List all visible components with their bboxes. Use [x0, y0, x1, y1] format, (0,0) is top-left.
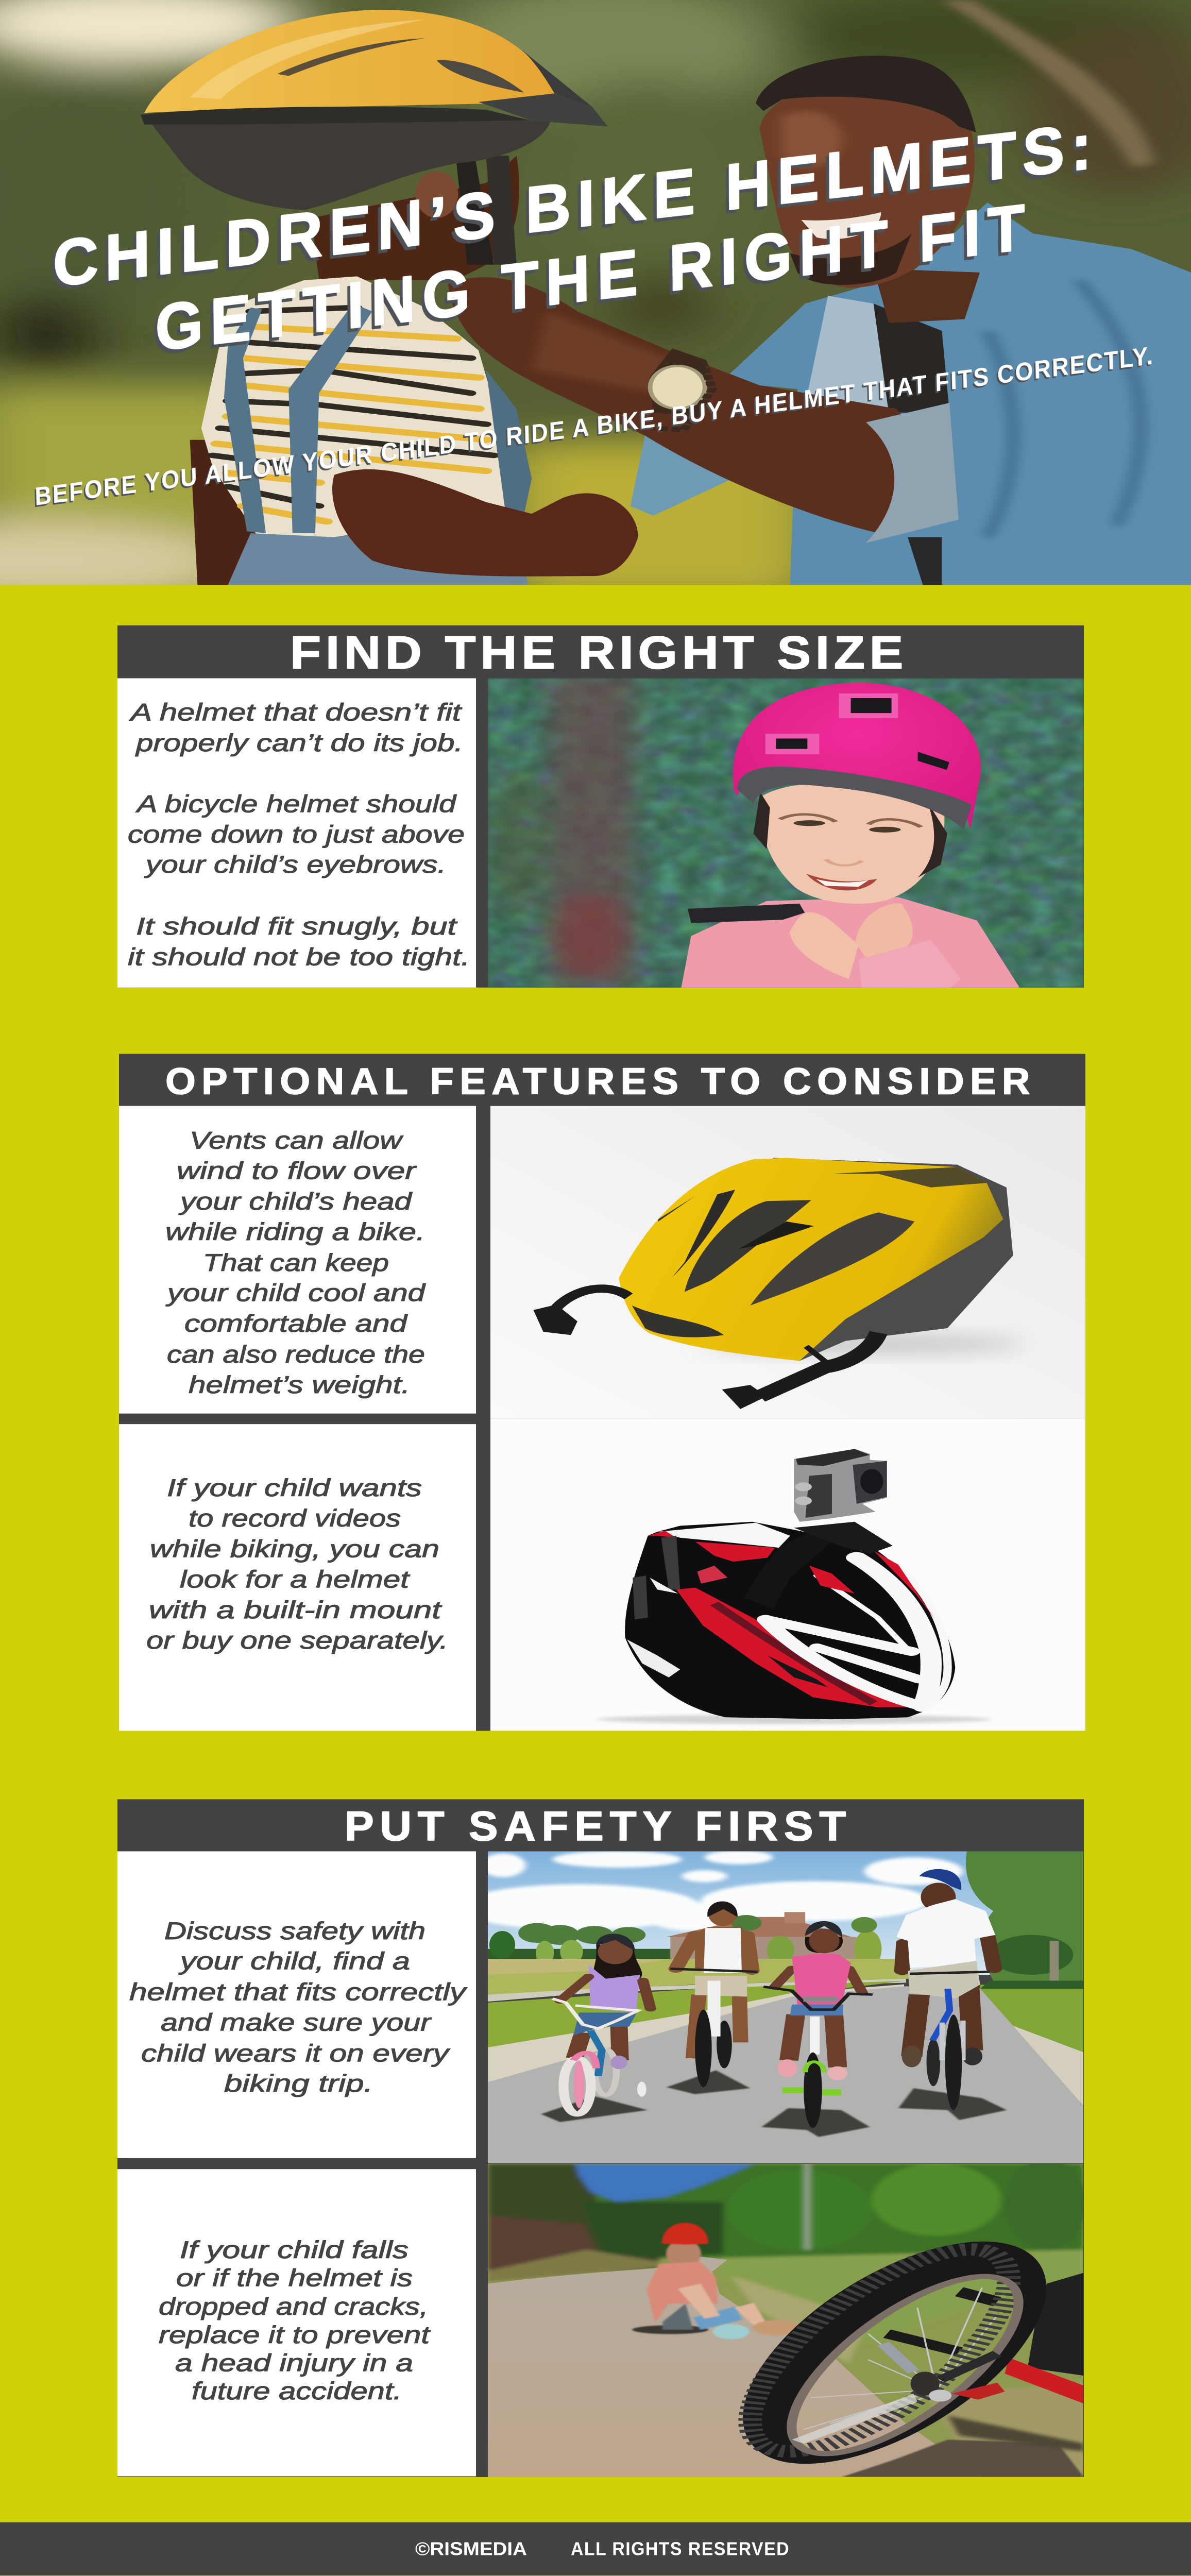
panel: put safety first	[117, 1799, 1108, 2489]
hero title	[53, 109, 1098, 365]
text block: discuss safety	[117, 1851, 476, 2158]
panel frame	[119, 1054, 1085, 1731]
text block: vents: Vents can allow	[190, 1127, 403, 1154]
text block: video mount: look for a helmet	[180, 1566, 410, 1593]
man: arm, hand, watch	[448, 277, 942, 535]
text block: vents: your child cool and	[165, 1280, 426, 1307]
panel: optional features to consider	[119, 1054, 1085, 1731]
text block: helmet fit advice: it should not be too tight.	[128, 943, 470, 971]
photo: red helmet with action camera	[490, 1418, 1085, 1731]
text block: vents: That can keep	[203, 1249, 389, 1277]
panel frame	[117, 1799, 1084, 2477]
text block: discuss safety: Discuss safety with	[164, 1918, 426, 1945]
text block: vents: can also reduce the	[167, 1341, 425, 1368]
hero photo: father fitting a helmet on his son	[0, 0, 1191, 619]
text block: discuss safety: biking trip.	[224, 2070, 373, 2097]
text block: replace after a fall: a head injury in a	[175, 2350, 413, 2377]
text block: replace after a fall: dropped and cracks,	[159, 2293, 428, 2320]
text block: helmet fit advice: A helmet that doesn’t fit	[129, 699, 462, 726]
photo: family cycling on a road	[457, 1850, 1084, 2163]
text block: discuss safety: helmet that fits correctly	[129, 1978, 467, 2006]
footer copyright text: ALL RIGHTS RESERVED	[571, 2538, 790, 2560]
fallen child	[632, 2223, 802, 2340]
photo: yellow vented helmet	[490, 1106, 1085, 1418]
heading: put safety first: PUT SAFETY FIRST	[345, 1803, 852, 1850]
panel frame	[117, 625, 1084, 988]
text block: video mount	[119, 1424, 476, 1731]
heading: find the right size: FIND THE RIGHT SIZE	[290, 626, 908, 679]
text block: video mount: to record videos	[189, 1505, 401, 1532]
photo: smiling girl in a pink helmet	[488, 679, 1084, 988]
text block: replace after a fall: or if the helmet is	[176, 2265, 413, 2292]
text block: discuss safety: and make sure your	[161, 2009, 432, 2036]
text block: helmet fit advice: your child’s eyebrows.	[144, 851, 446, 878]
text block: replace after a fall	[117, 2169, 476, 2477]
text block: video mount: If your child wants	[167, 1475, 422, 1501]
text block: vents: wind to flow over	[177, 1158, 417, 1184]
text block: replace after a fall: replace it to prevent	[159, 2321, 431, 2349]
text block: discuss safety: your child, find a	[178, 1947, 410, 1975]
bicycle parts behind wheel	[887, 2273, 1084, 2403]
rider: father in white polo	[896, 1869, 995, 2110]
text block: helmet fit advice	[117, 679, 476, 988]
photo: child fallen beside a bicycle wheel	[488, 2158, 1108, 2489]
text block: video mount: with a built-in mount	[149, 1597, 442, 1623]
background trees and house	[488, 1912, 881, 1968]
child: overalls	[224, 308, 266, 533]
text block: vents: your child’s head	[178, 1188, 413, 1215]
wheel	[681, 2216, 1108, 2489]
text block: vents: while riding a bike.	[165, 1218, 425, 1246]
text block: replace after a fall: future accident.	[192, 2378, 402, 2405]
text block: discuss safety: child wears it on every	[141, 2040, 450, 2067]
text block: vents	[119, 1106, 476, 1414]
text block: video mount: while biking, you can	[150, 1535, 439, 1563]
text block: video mount: or buy one separately.	[146, 1627, 448, 1654]
footer copyright text	[415, 2538, 790, 2560]
footer copyright text: ©RISMEDIA	[415, 2538, 527, 2560]
rider: mother in white	[670, 1901, 758, 2087]
text block: replace after a fall: If your child falls	[180, 2236, 409, 2264]
child: shirt	[201, 276, 509, 537]
man: head	[874, 268, 980, 323]
text block: vents: helmet’s weight.	[189, 1371, 410, 1399]
child: head and helmet	[190, 440, 256, 585]
lawns, curbs and road	[488, 1959, 910, 1995]
rider: girl in purple	[552, 1934, 651, 2114]
text block: helmet fit advice: It should fit snugly, but	[136, 913, 457, 940]
text block: helmet fit advice: properly can’t do its job.	[135, 730, 463, 756]
text block: helmet fit advice: A bicycle helmet should	[135, 790, 457, 818]
text block: helmet fit advice: come down to just above	[128, 821, 465, 848]
text block: vents: comfortable and	[184, 1310, 408, 1337]
footer bar	[0, 2522, 1191, 2575]
rider: girl in pink	[763, 1921, 873, 2128]
child: front arm	[332, 469, 638, 577]
panel: find the right size	[117, 625, 1084, 988]
man: shirt	[722, 202, 1191, 585]
